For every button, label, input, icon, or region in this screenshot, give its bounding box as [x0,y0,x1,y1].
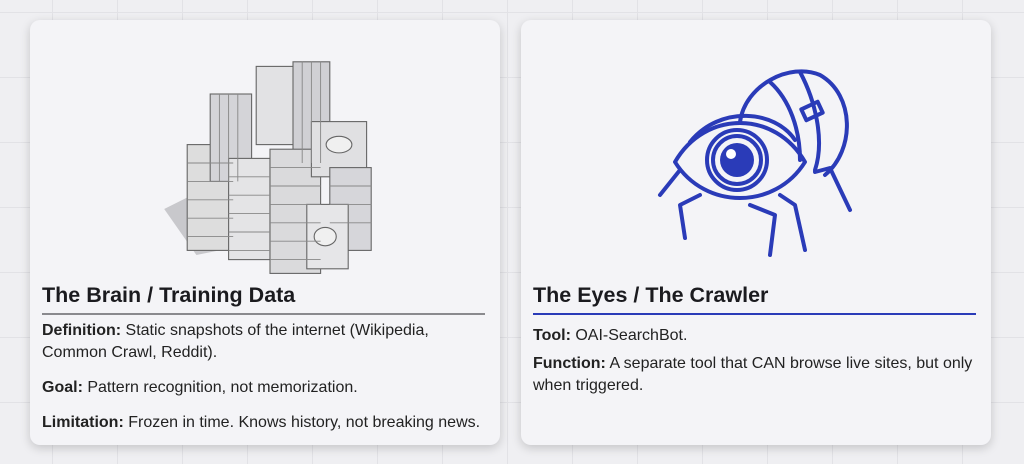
text block: details: Definition: Static snapshots of the internet (Wikipedia, Common Crawl, Reddit). [42,322,429,361]
text block: details: Goal: Pattern recognition, not memorization. [42,379,358,396]
text block: details: Function: A separate tool that CAN browse live sites, but only when triggered. [533,355,972,394]
icon: eye spider robot [658,69,852,257]
text block: details [42,322,480,431]
panel: crawler [521,20,991,445]
text block: details: Limitation: Frozen in time. Knows history, not breaking news. [42,414,480,431]
heading: The Eyes / The Crawler [533,283,768,307]
panel: training data [30,20,500,445]
heading: The Brain / Training Data [42,283,295,307]
text block: details [533,327,972,394]
icon: stack of books and hard drives [164,61,372,274]
text block: details: Tool: OAI-SearchBot. [533,327,687,344]
